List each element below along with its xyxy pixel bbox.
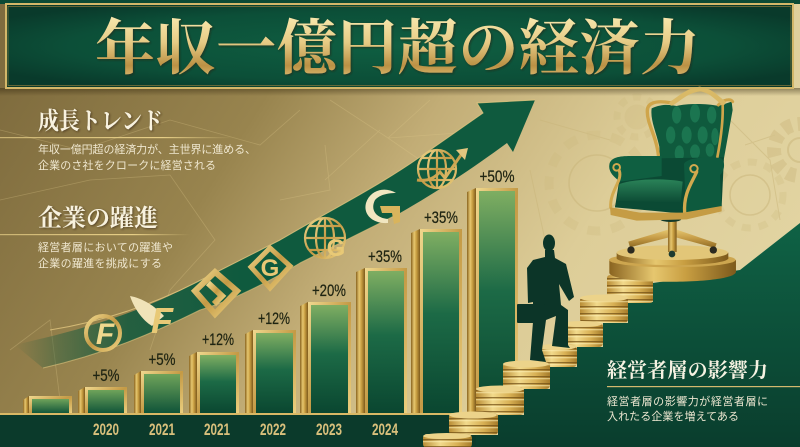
percentage labels: +35% xyxy=(368,247,402,266)
bar 8 xyxy=(411,229,462,414)
body: executive influence xyxy=(607,394,768,423)
bar 2 xyxy=(78,387,127,414)
year labels: 2020 xyxy=(93,420,119,439)
heading: corporate leap: 企業の躍進 xyxy=(38,205,158,232)
coin stairs xyxy=(423,294,628,447)
banner shadow xyxy=(0,88,800,96)
coin stack 5 xyxy=(503,360,550,389)
year labels: 2021 xyxy=(149,420,175,439)
icon: circled F: F xyxy=(96,318,115,351)
text block: growth trend xyxy=(0,108,256,172)
chair back xyxy=(651,102,733,167)
gear decorations xyxy=(530,97,800,240)
body: executive influence: 入れたる企業を増えてある xyxy=(607,409,739,423)
bottom year band xyxy=(0,414,476,447)
seat xyxy=(617,179,683,203)
baseline xyxy=(0,413,476,415)
tufting xyxy=(666,104,719,161)
heading: growth trend: 成長トレンド xyxy=(38,108,163,135)
right arm xyxy=(684,157,724,213)
icon: circled F xyxy=(86,316,120,351)
left arm xyxy=(609,156,662,182)
year labels: 2021 xyxy=(204,420,230,439)
pedestal xyxy=(609,245,736,282)
bar 3 xyxy=(134,371,183,414)
executive chair xyxy=(609,89,733,257)
year labels: 2023 xyxy=(316,420,342,439)
growth arrow xyxy=(15,100,535,368)
bar 7 xyxy=(356,268,407,414)
bar chart xyxy=(23,188,518,414)
year labels: 2024 xyxy=(372,420,398,439)
crest and frame xyxy=(647,89,733,157)
percentage labels: +12% xyxy=(202,330,234,349)
banner xyxy=(0,0,800,88)
coin stack 7 xyxy=(449,412,498,435)
bar 9 xyxy=(467,188,518,414)
heading: executive influence: 経営者層の影響力 xyxy=(607,359,768,382)
coin stack 4 xyxy=(538,344,577,367)
coin stack 3 xyxy=(562,321,603,347)
gold trim xyxy=(611,164,698,213)
body: growth trend: 企業のさ社をクロークに経営される xyxy=(38,158,216,172)
bar 1 xyxy=(23,396,72,414)
bar 5 xyxy=(245,330,296,414)
chair base xyxy=(627,216,717,257)
green stair background panel xyxy=(472,223,800,447)
icon: globe with arrow xyxy=(417,148,468,188)
year labels: 2022 xyxy=(260,420,286,439)
seat rail xyxy=(610,206,722,221)
year labels xyxy=(93,420,398,439)
title: 年収一億円超の経済力 xyxy=(95,16,700,82)
icon: globe G: G xyxy=(327,235,345,262)
coin stack 8 xyxy=(423,433,472,447)
bar 6 xyxy=(300,302,351,414)
body: corporate leap: 経営者層においての躍進や xyxy=(38,240,173,254)
body: executive influence: 経営者層の影響力が経営者層に xyxy=(607,394,768,408)
icon: diamond G emblem: G xyxy=(261,255,279,282)
background line network xyxy=(0,100,500,400)
percentage labels: +50% xyxy=(480,167,514,186)
coin stack 6 xyxy=(476,386,524,415)
percentage labels: +5% xyxy=(92,366,120,385)
icon: winged F xyxy=(130,296,174,341)
bar 4 xyxy=(189,352,239,414)
body: growth trend: 年収一億円超の経済力が、主世界に進める、 xyxy=(38,142,256,156)
body: corporate leap: 企業の躍進を挑成にする xyxy=(38,256,162,270)
icon: swoosh G xyxy=(365,190,400,224)
icon: diamond emblem xyxy=(195,272,237,314)
percentage labels: +12% xyxy=(258,309,290,328)
text block: corporate leap xyxy=(0,205,190,270)
icon: winged F: F xyxy=(151,300,174,341)
coin stack 2 xyxy=(580,294,628,323)
percentage labels: +20% xyxy=(312,281,346,300)
body: corporate leap xyxy=(38,240,173,270)
icon: globe G xyxy=(305,218,345,262)
body: growth trend xyxy=(38,142,256,172)
percentage labels: +35% xyxy=(424,208,458,227)
pedestal coin stack xyxy=(607,275,653,303)
businessman silhouette with briefcase xyxy=(517,234,574,362)
text block: executive influence xyxy=(607,359,800,423)
body underlay xyxy=(615,157,724,214)
percentage labels xyxy=(92,167,514,385)
percentage labels: +5% xyxy=(148,350,176,369)
icon: diamond G emblem xyxy=(251,248,290,288)
